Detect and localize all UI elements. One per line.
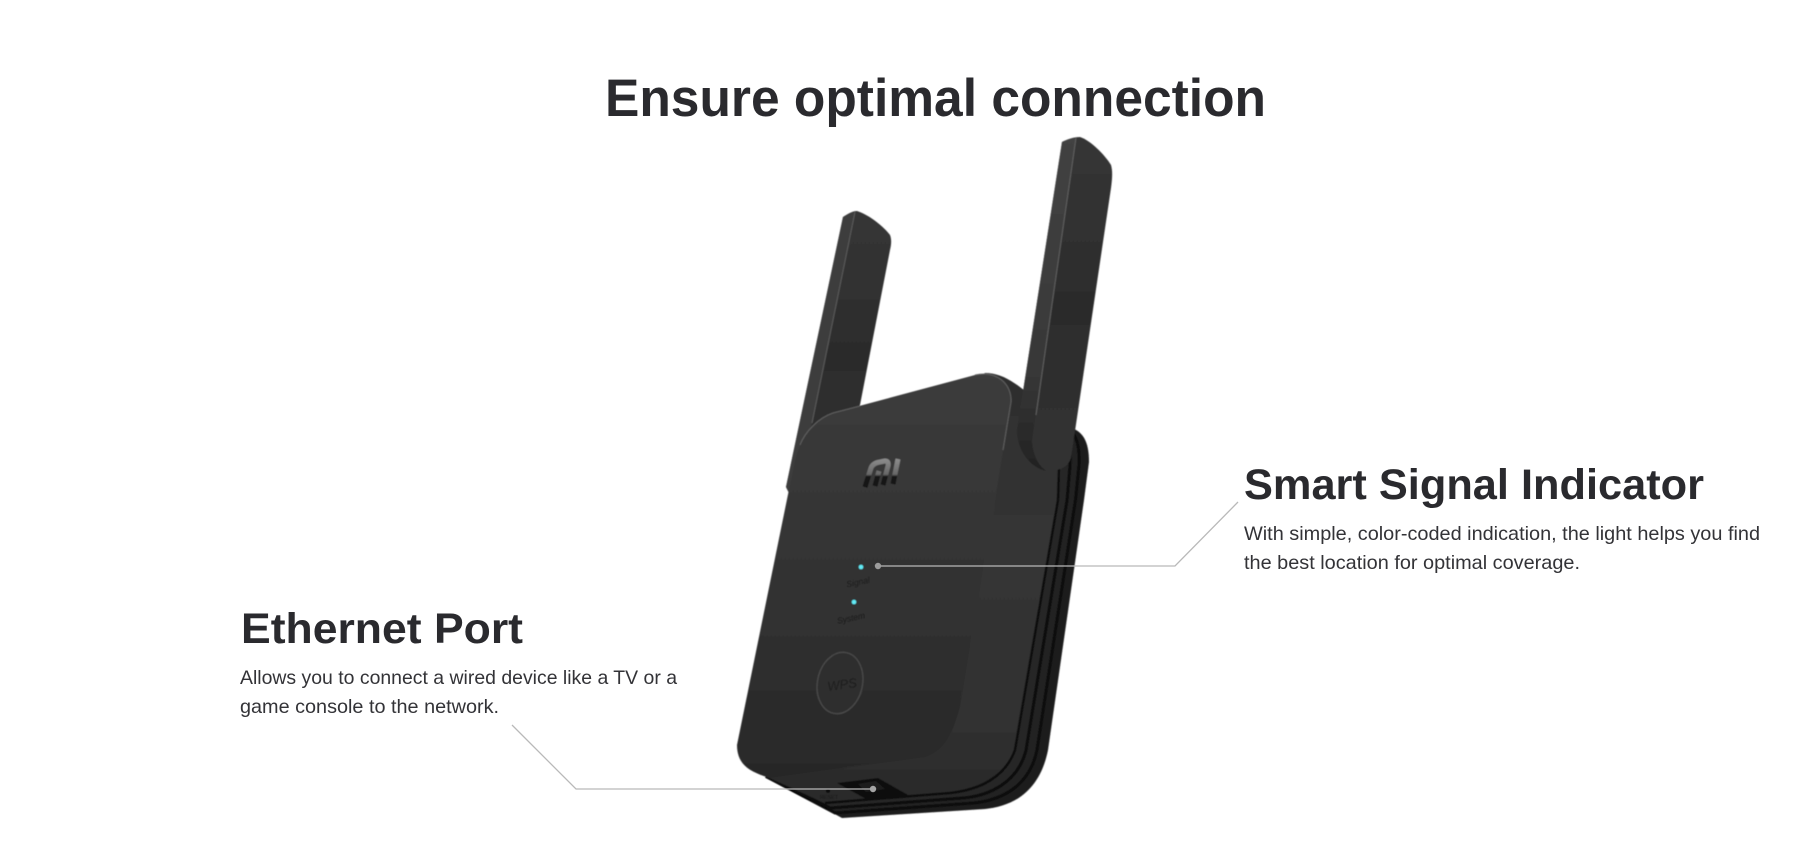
system label: System xyxy=(836,610,866,626)
reset hole and label xyxy=(820,789,839,801)
signal LED xyxy=(859,565,863,569)
Mi logo xyxy=(865,459,898,487)
body front face xyxy=(737,374,1011,778)
WPS button: WPS xyxy=(826,675,858,694)
leader line: ethernet port xyxy=(512,725,876,792)
callout: smart signal indicator xyxy=(1244,461,1760,574)
ethernet port xyxy=(837,778,908,800)
side groove edge xyxy=(825,440,1060,803)
system LED xyxy=(852,600,856,604)
body side xyxy=(767,373,1062,803)
face edge highlight xyxy=(800,374,1011,450)
callout: smart signal indicator: the best location for optimal coverage. xyxy=(1244,552,1580,574)
left antenna xyxy=(786,211,891,495)
callout: smart signal indicator: Smart Signal Indicator xyxy=(1244,461,1704,509)
callout: ethernet port: Ethernet Port xyxy=(241,605,523,653)
callout: ethernet port xyxy=(240,605,677,718)
right antenna xyxy=(1017,137,1112,471)
reset hole and label: RESET xyxy=(820,795,839,801)
WPS button xyxy=(812,648,868,718)
signal label: Signal xyxy=(845,574,872,589)
leader line: smart signal indicator xyxy=(875,502,1238,569)
back ribs xyxy=(767,425,1089,818)
callout: smart signal indicator: With simple, color-coded indication, the light helps you find xyxy=(1244,523,1760,545)
callout: ethernet port: game console to the network. xyxy=(240,696,499,718)
title: Ensure optimal connection xyxy=(605,69,1266,128)
callout: ethernet port: Allows you to connect a wired device like a TV or a xyxy=(240,667,677,689)
device: Wi-Fi range extender xyxy=(737,137,1112,818)
